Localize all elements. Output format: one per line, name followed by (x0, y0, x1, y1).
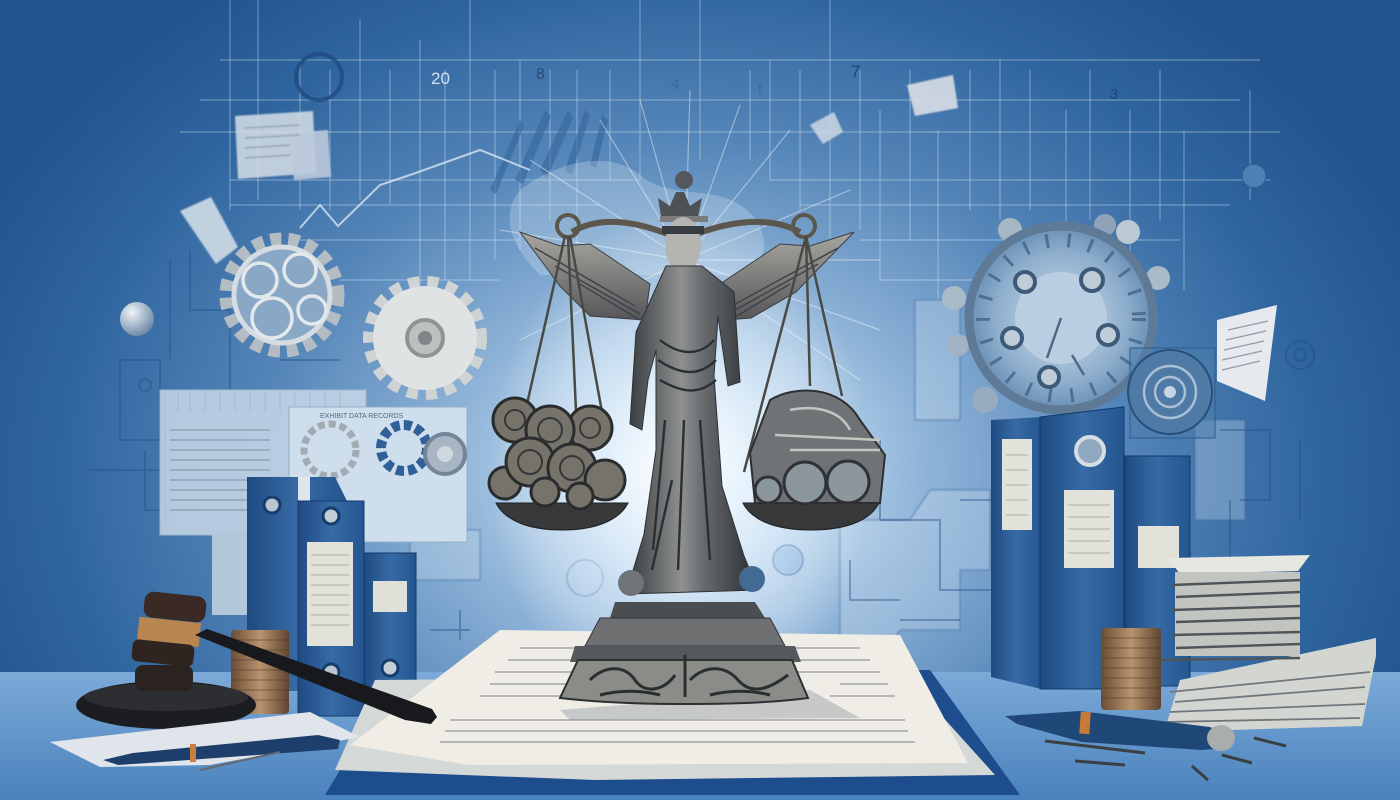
pen left (50, 712, 360, 770)
ball (120, 302, 154, 336)
numbers: 8 (536, 66, 545, 83)
numbers (431, 62, 1118, 103)
statue: scale beam (557, 215, 815, 240)
glow behind statue (490, 210, 870, 730)
numbers: 7 (851, 62, 860, 81)
clock (942, 214, 1215, 438)
statue (489, 171, 885, 704)
pen right (1005, 711, 1286, 780)
statue: orbs (618, 570, 644, 596)
ghost circuit lines (90, 54, 1314, 640)
ghost map shapes (410, 300, 1245, 660)
background grid lines (180, 0, 1280, 300)
paper stack right (1160, 555, 1376, 732)
statue: chains (527, 236, 842, 472)
main document stack (325, 630, 1020, 795)
numbers: 20 (431, 69, 450, 88)
paper sheets floating (180, 75, 958, 264)
bar chart ghost (490, 110, 608, 194)
white blob shapes (510, 161, 764, 275)
numbers: 4 (671, 76, 679, 93)
paper on right of clock (1217, 305, 1277, 401)
binders left (247, 477, 416, 716)
statue: wings (520, 232, 854, 320)
sun rays (500, 90, 880, 380)
binders right (991, 407, 1190, 689)
documents behind left binders (160, 390, 467, 615)
gear left (226, 239, 338, 351)
table (0, 672, 1400, 800)
documents behind left binders: EXHIBIT DATA RECORDS (320, 413, 404, 420)
statue: right pan (743, 390, 885, 530)
statue: pedestal (560, 602, 808, 704)
gear middle (369, 282, 481, 394)
statue: crown (658, 171, 708, 273)
coins right (1101, 628, 1161, 710)
numbers: 3 (1110, 86, 1118, 103)
chart line (300, 150, 530, 228)
coins left (231, 630, 289, 714)
numbers: f (758, 81, 762, 97)
statue: body (626, 266, 758, 594)
gavel (76, 591, 437, 729)
statue: left pan (489, 398, 628, 530)
